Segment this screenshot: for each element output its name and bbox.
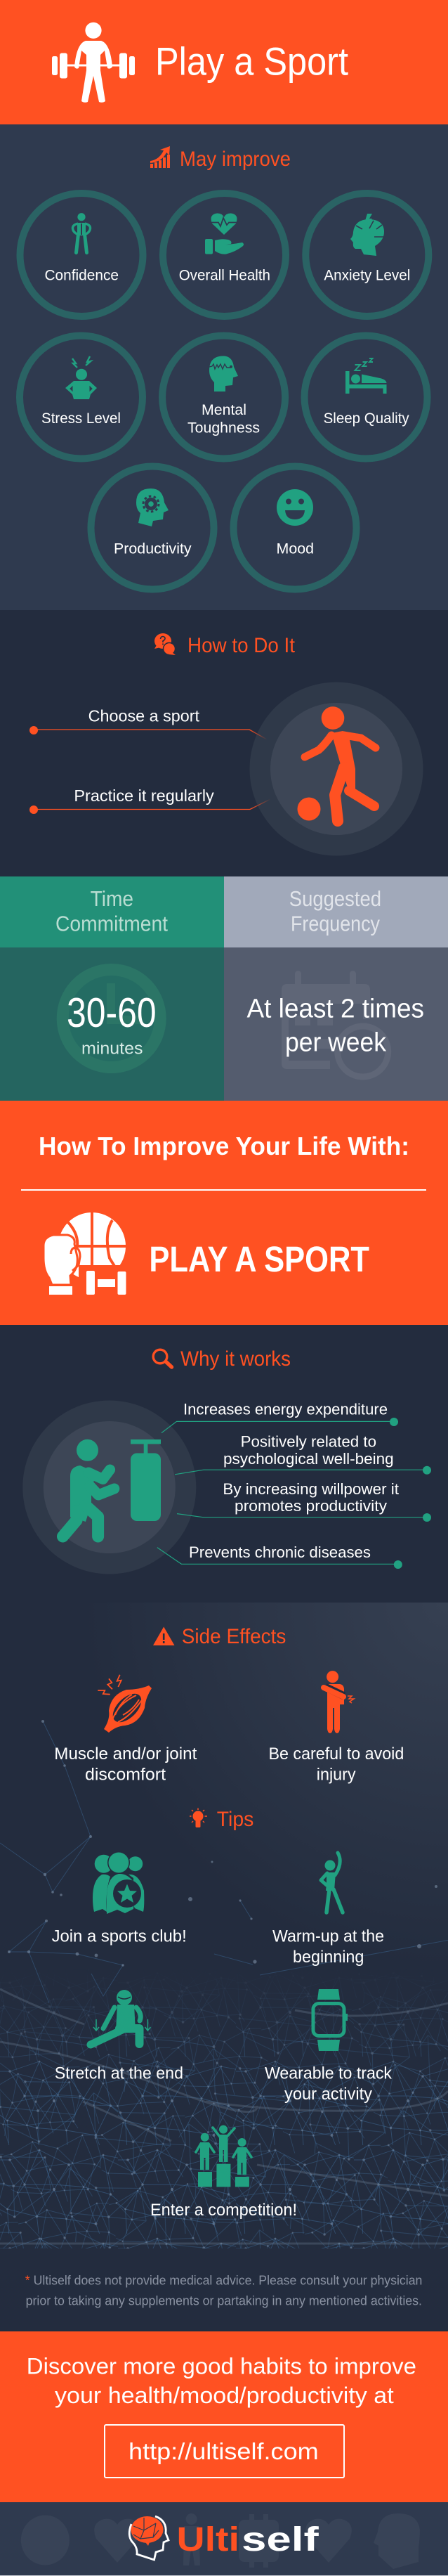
item: stress level: Stress Level [41,410,121,427]
tip: stretch: Stretch at the end [55,2064,183,2083]
heading: side effects: Side Effects [182,1625,286,1648]
stat: at least 2 times per week: per week [285,1028,387,1058]
title: Play a Sport [155,39,348,83]
item: stress level [20,336,143,458]
tip: wearable: Wearable to track [265,2064,393,2083]
icon: sport equipment [44,1210,129,1297]
link box: http://ultiself.com [129,2438,319,2464]
item: mental toughness [162,336,285,458]
heading: play a sport: PLAY A SPORT [149,1239,369,1279]
stat: 30-60 minutes: 30-60 [67,990,157,1036]
item: mental toughness: Toughness [187,420,260,436]
reason: psychological well-being [175,1433,431,1475]
panel: side effects and tips [0,1603,448,2248]
heading: how to do it: How to Do It [187,634,296,657]
item: confidence [20,193,143,316]
tip: join a sports club: Join a sports club! [52,1927,187,1946]
heading: may improve: May improve [180,148,291,171]
heading: suggested frequency: Suggested [289,886,381,911]
text: discover more: Discover more good habits to improve [27,2353,416,2378]
step: choose a sport: Choose a sport [88,707,200,725]
item: anxiety level: Anxiety Level [324,267,410,284]
panel: suggested frequency [224,876,448,1101]
text: medical disclaimer [25,2273,422,2308]
text: discover more: your health/mood/productivity at [55,2383,394,2408]
icon: ghost clock [62,970,160,1067]
item: overall health: Overall Health [179,267,270,284]
tip: stretch [55,1990,183,2083]
tip: wearable: your activity [284,2085,372,2104]
tip: enter a competition: Enter a competition! [150,2201,297,2220]
item: mood: Mood [277,541,314,557]
heading: why it works: Why it works [180,1347,291,1371]
icon: magnifier [153,1350,171,1367]
reason: psychological well-being: psychological well-being [223,1450,394,1468]
tip: warm-up: beginning [293,1948,364,1967]
effect: injury: Be careful to avoid [268,1745,404,1763]
link box [105,2425,344,2478]
panel: how to do it [0,610,448,876]
item: sleep quality: Sleep Quality [324,410,409,427]
panel: call to action [0,2331,448,2502]
illustration: boxer with punching bag [22,1400,196,1574]
heading: time commitment: Commitment [55,911,168,936]
tip: warm-up: Warm-up at the [272,1927,384,1946]
heading: time commitment [55,886,168,936]
step: choose a sport [29,707,267,739]
effect: injury [268,1671,404,1784]
text: medical disclaimer: prior to taking any supplements or partaking in any mentioned activities. [26,2294,422,2308]
item: mental toughness: Mental [202,402,246,418]
effect: muscle discomfort: Muscle and/or joint [54,1745,197,1763]
reason: chronic diseases: Prevents chronic diseases [189,1543,371,1561]
reason: psychological well-being: Positively related to [241,1433,376,1451]
reason: chronic diseases [157,1543,402,1569]
panel: why it works [0,1325,448,1603]
reason: productivity: promotes productivity [235,1497,387,1515]
logo: ultiself [129,2516,319,2560]
stat: at least 2 times per week: At least 2 times [247,994,424,1023]
text: discover more [27,2353,416,2408]
icon: light bulb [190,1808,207,1827]
stat: at least 2 times per week [247,994,424,1058]
stat: 30-60 minutes: minutes [81,1039,143,1058]
panel: footer logo [0,2502,448,2576]
item: confidence: Confidence [45,267,119,284]
icon: weightlifter [52,22,135,103]
background: ghost icons [21,2513,420,2569]
logo: ultiself: Ulti [177,2521,239,2558]
panel: may improve [0,124,448,610]
item: productivity: Productivity [114,541,192,557]
step: practice it regularly: Practice it regularly [74,787,214,805]
panel: disclaimer [0,2248,448,2331]
header banner [0,0,448,124]
icon: warning triangle [153,1626,174,1645]
tip: enter a competition [150,2125,297,2220]
item: overall health [163,193,286,316]
item: mood [233,467,357,589]
tip: warm-up [272,1853,384,1967]
tip: wearable [265,1989,393,2104]
item: anxiety level [305,193,428,316]
illustration: soccer player [250,682,423,856]
icon: rising chart [150,146,170,168]
item: sleep quality [305,336,427,458]
icon: ghost calendar [282,971,388,1077]
effect: muscle discomfort: discomfort [85,1766,166,1784]
tip: join a sports club [52,1851,187,1946]
background: network mesh [0,1720,448,2248]
text: medical disclaimer: * Ultiself does not provide medical advice. Please consult your physician [25,2273,422,2287]
icon: speech bubbles [154,633,176,655]
reason: productivity: By increasing willpower it [223,1480,399,1498]
heading: how to improve your life with: How To Improve Your Life With: [39,1132,409,1160]
stat: 30-60 minutes [67,990,157,1058]
panel: time commitment [0,876,224,1101]
effect: muscle discomfort [54,1675,197,1784]
heading: tips: Tips [217,1808,253,1831]
effect: injury: injury [317,1766,356,1784]
reason: energy expenditure [162,1400,398,1433]
reason: energy expenditure: Increases energy expenditure [183,1400,388,1418]
heading: time commitment: Time [91,886,133,911]
item: productivity [91,467,213,589]
panel: how to improve banner [0,1101,448,1325]
reason: productivity [177,1480,431,1522]
heading: suggested frequency: Frequency [291,911,380,936]
heading: suggested frequency [289,886,381,936]
step: practice it regularly [29,787,270,814]
logo: ultiself: self [242,2521,319,2558]
